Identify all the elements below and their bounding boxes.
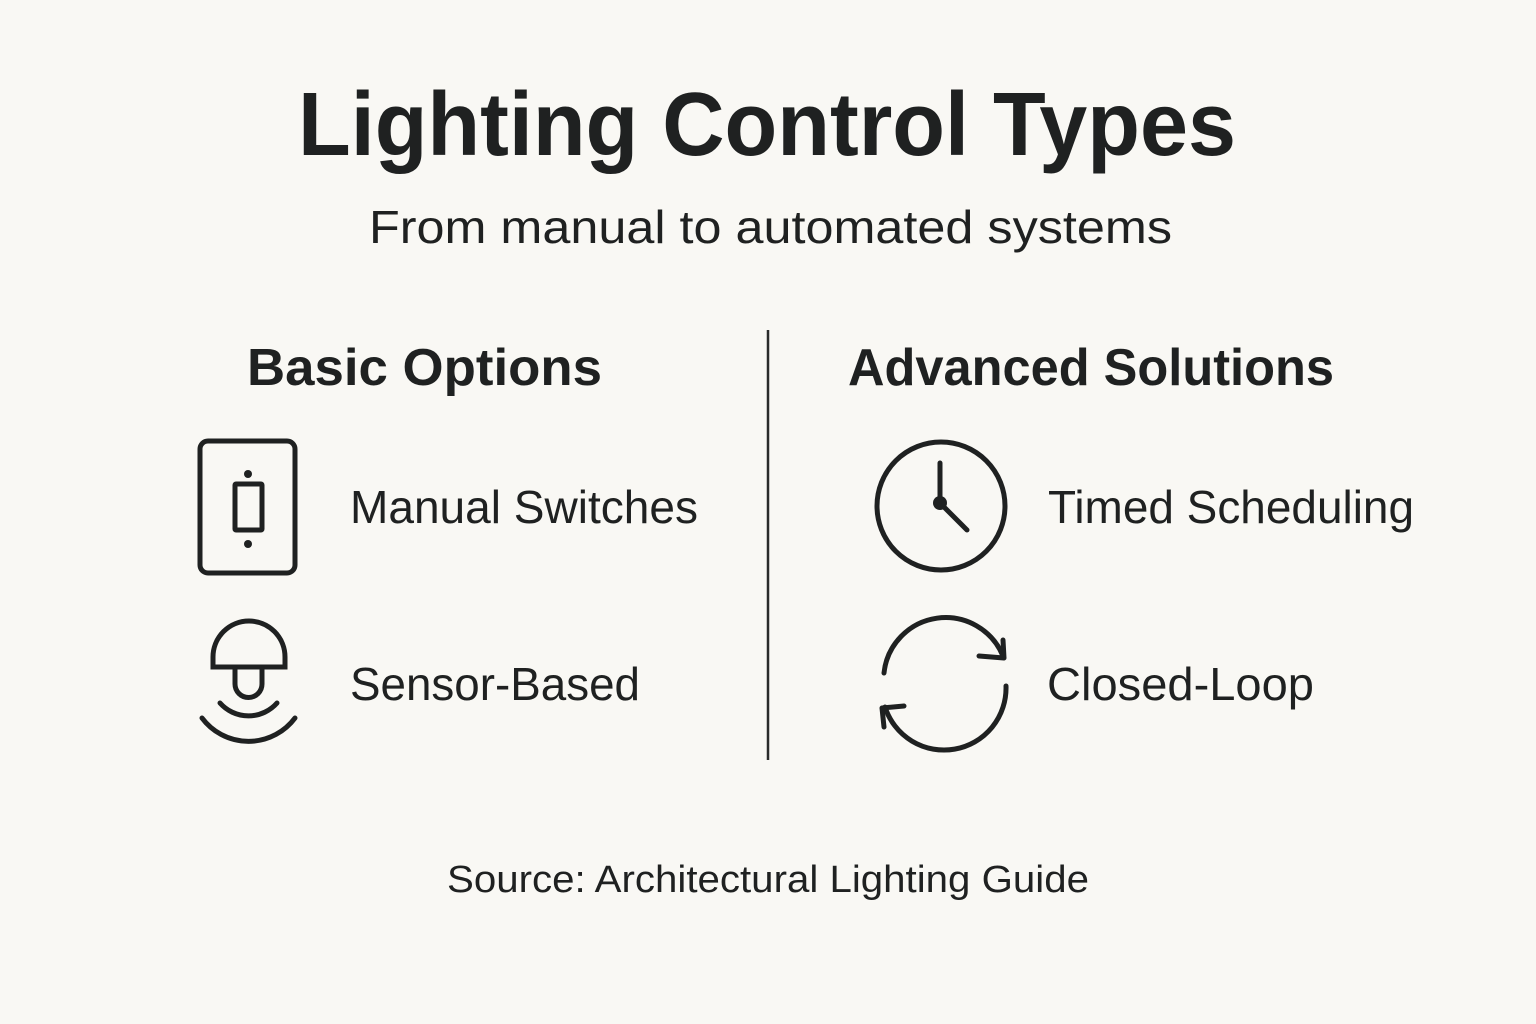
panel: basic options: [200, 339, 698, 741]
heading: advanced solutions: Advanced Solutions: [848, 339, 1334, 397]
icon: light switch: [200, 441, 295, 573]
icon: closed loop arrows: [882, 618, 1006, 750]
panel: advanced solutions: [848, 339, 1414, 750]
label: closed-loop: Closed-Loop: [1047, 658, 1314, 710]
icon: clock: [877, 442, 1005, 570]
subtitle: From manual to automated systems: [369, 201, 1172, 253]
label: manual switches: Manual Switches: [350, 481, 698, 533]
source footnote: Source: Architectural Lighting Guide: [447, 859, 1089, 901]
heading: basic options: Basic Options: [247, 339, 602, 397]
title: Lighting Control Types: [298, 75, 1236, 175]
label: sensor-based: Sensor-Based: [350, 658, 640, 710]
icon: sensor: [202, 621, 295, 741]
label: timed scheduling: Timed Scheduling: [1048, 481, 1414, 533]
